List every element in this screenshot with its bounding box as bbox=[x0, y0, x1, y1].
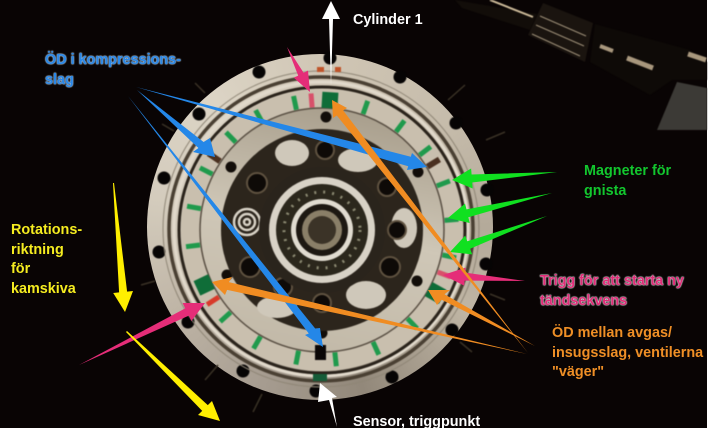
arrow: compression TDC right bbox=[136, 87, 427, 170]
cam disc base bbox=[147, 54, 493, 400]
label: compression TDC: slag bbox=[45, 72, 74, 88]
label: valve TDC: "väger" bbox=[552, 364, 604, 380]
faint radial spokes outside disc bbox=[141, 83, 505, 412]
label: rotation direction: för bbox=[11, 261, 30, 277]
label: valve TDC: insugsslag, ventilerna bbox=[552, 344, 703, 360]
sprocket cutouts bbox=[257, 140, 417, 318]
label: magnets: gnista bbox=[584, 182, 626, 198]
red and brown timing marks bbox=[206, 67, 452, 381]
sprocket holes bbox=[240, 141, 406, 312]
label: valve TDC: ÖD mellan avgas/ bbox=[552, 325, 672, 341]
label: rotation direction: riktning bbox=[11, 242, 64, 258]
plate holes bbox=[222, 112, 424, 338]
arrow: magnet 2 bbox=[448, 193, 552, 223]
sprocket bbox=[221, 129, 423, 331]
arrow: cylinder 1 bbox=[322, 1, 340, 86]
label: rotation direction: kamskiva bbox=[11, 280, 76, 296]
label: sensor: Sensor, triggpunkt bbox=[353, 414, 480, 430]
label: magnets bbox=[584, 163, 671, 198]
label: compression TDC bbox=[44, 50, 182, 88]
shaft at top right bbox=[455, 0, 707, 130]
concentric rings bbox=[163, 71, 479, 387]
marker band bbox=[181, 89, 463, 371]
arrow: trigger left bbox=[79, 303, 205, 365]
arrow: trigger top bbox=[287, 47, 310, 92]
label: trigger: Trigg för att starta ny bbox=[540, 273, 684, 289]
arrow: rotation top bbox=[113, 183, 133, 312]
arrow: trigger right bbox=[443, 268, 525, 286]
arrow: valve TDC top bbox=[332, 100, 528, 353]
label: trigger bbox=[539, 272, 685, 308]
label: rotation direction: Rotations- bbox=[11, 222, 82, 238]
label: trigger: tändsekvens bbox=[540, 292, 627, 308]
inner plate bbox=[200, 108, 444, 352]
green magnet marks bbox=[186, 92, 459, 367]
bolt holes in outer ring bbox=[152, 52, 494, 398]
label: magnets: Magneter för bbox=[584, 163, 671, 179]
arrow: valve TDC right bbox=[428, 290, 535, 346]
arrow: magnet 1 bbox=[452, 168, 557, 188]
small striped bearing bbox=[234, 209, 260, 235]
arrow: sensor bbox=[318, 383, 337, 427]
arrow: compression TDC bottom bbox=[128, 96, 323, 347]
arrow: magnet 3 bbox=[450, 216, 547, 254]
label: rotation direction bbox=[11, 222, 82, 296]
label: cylinder 1: Cylinder 1 bbox=[353, 12, 423, 28]
label: valve TDC bbox=[552, 324, 704, 380]
label: compression TDC: ÖD i kompressions- bbox=[45, 52, 181, 68]
central hub and bearing bbox=[259, 167, 385, 293]
arrow: compression TDC left bbox=[137, 90, 215, 157]
arrow: rotation bottom bbox=[126, 331, 220, 421]
arrow: valve TDC left bbox=[212, 277, 527, 354]
